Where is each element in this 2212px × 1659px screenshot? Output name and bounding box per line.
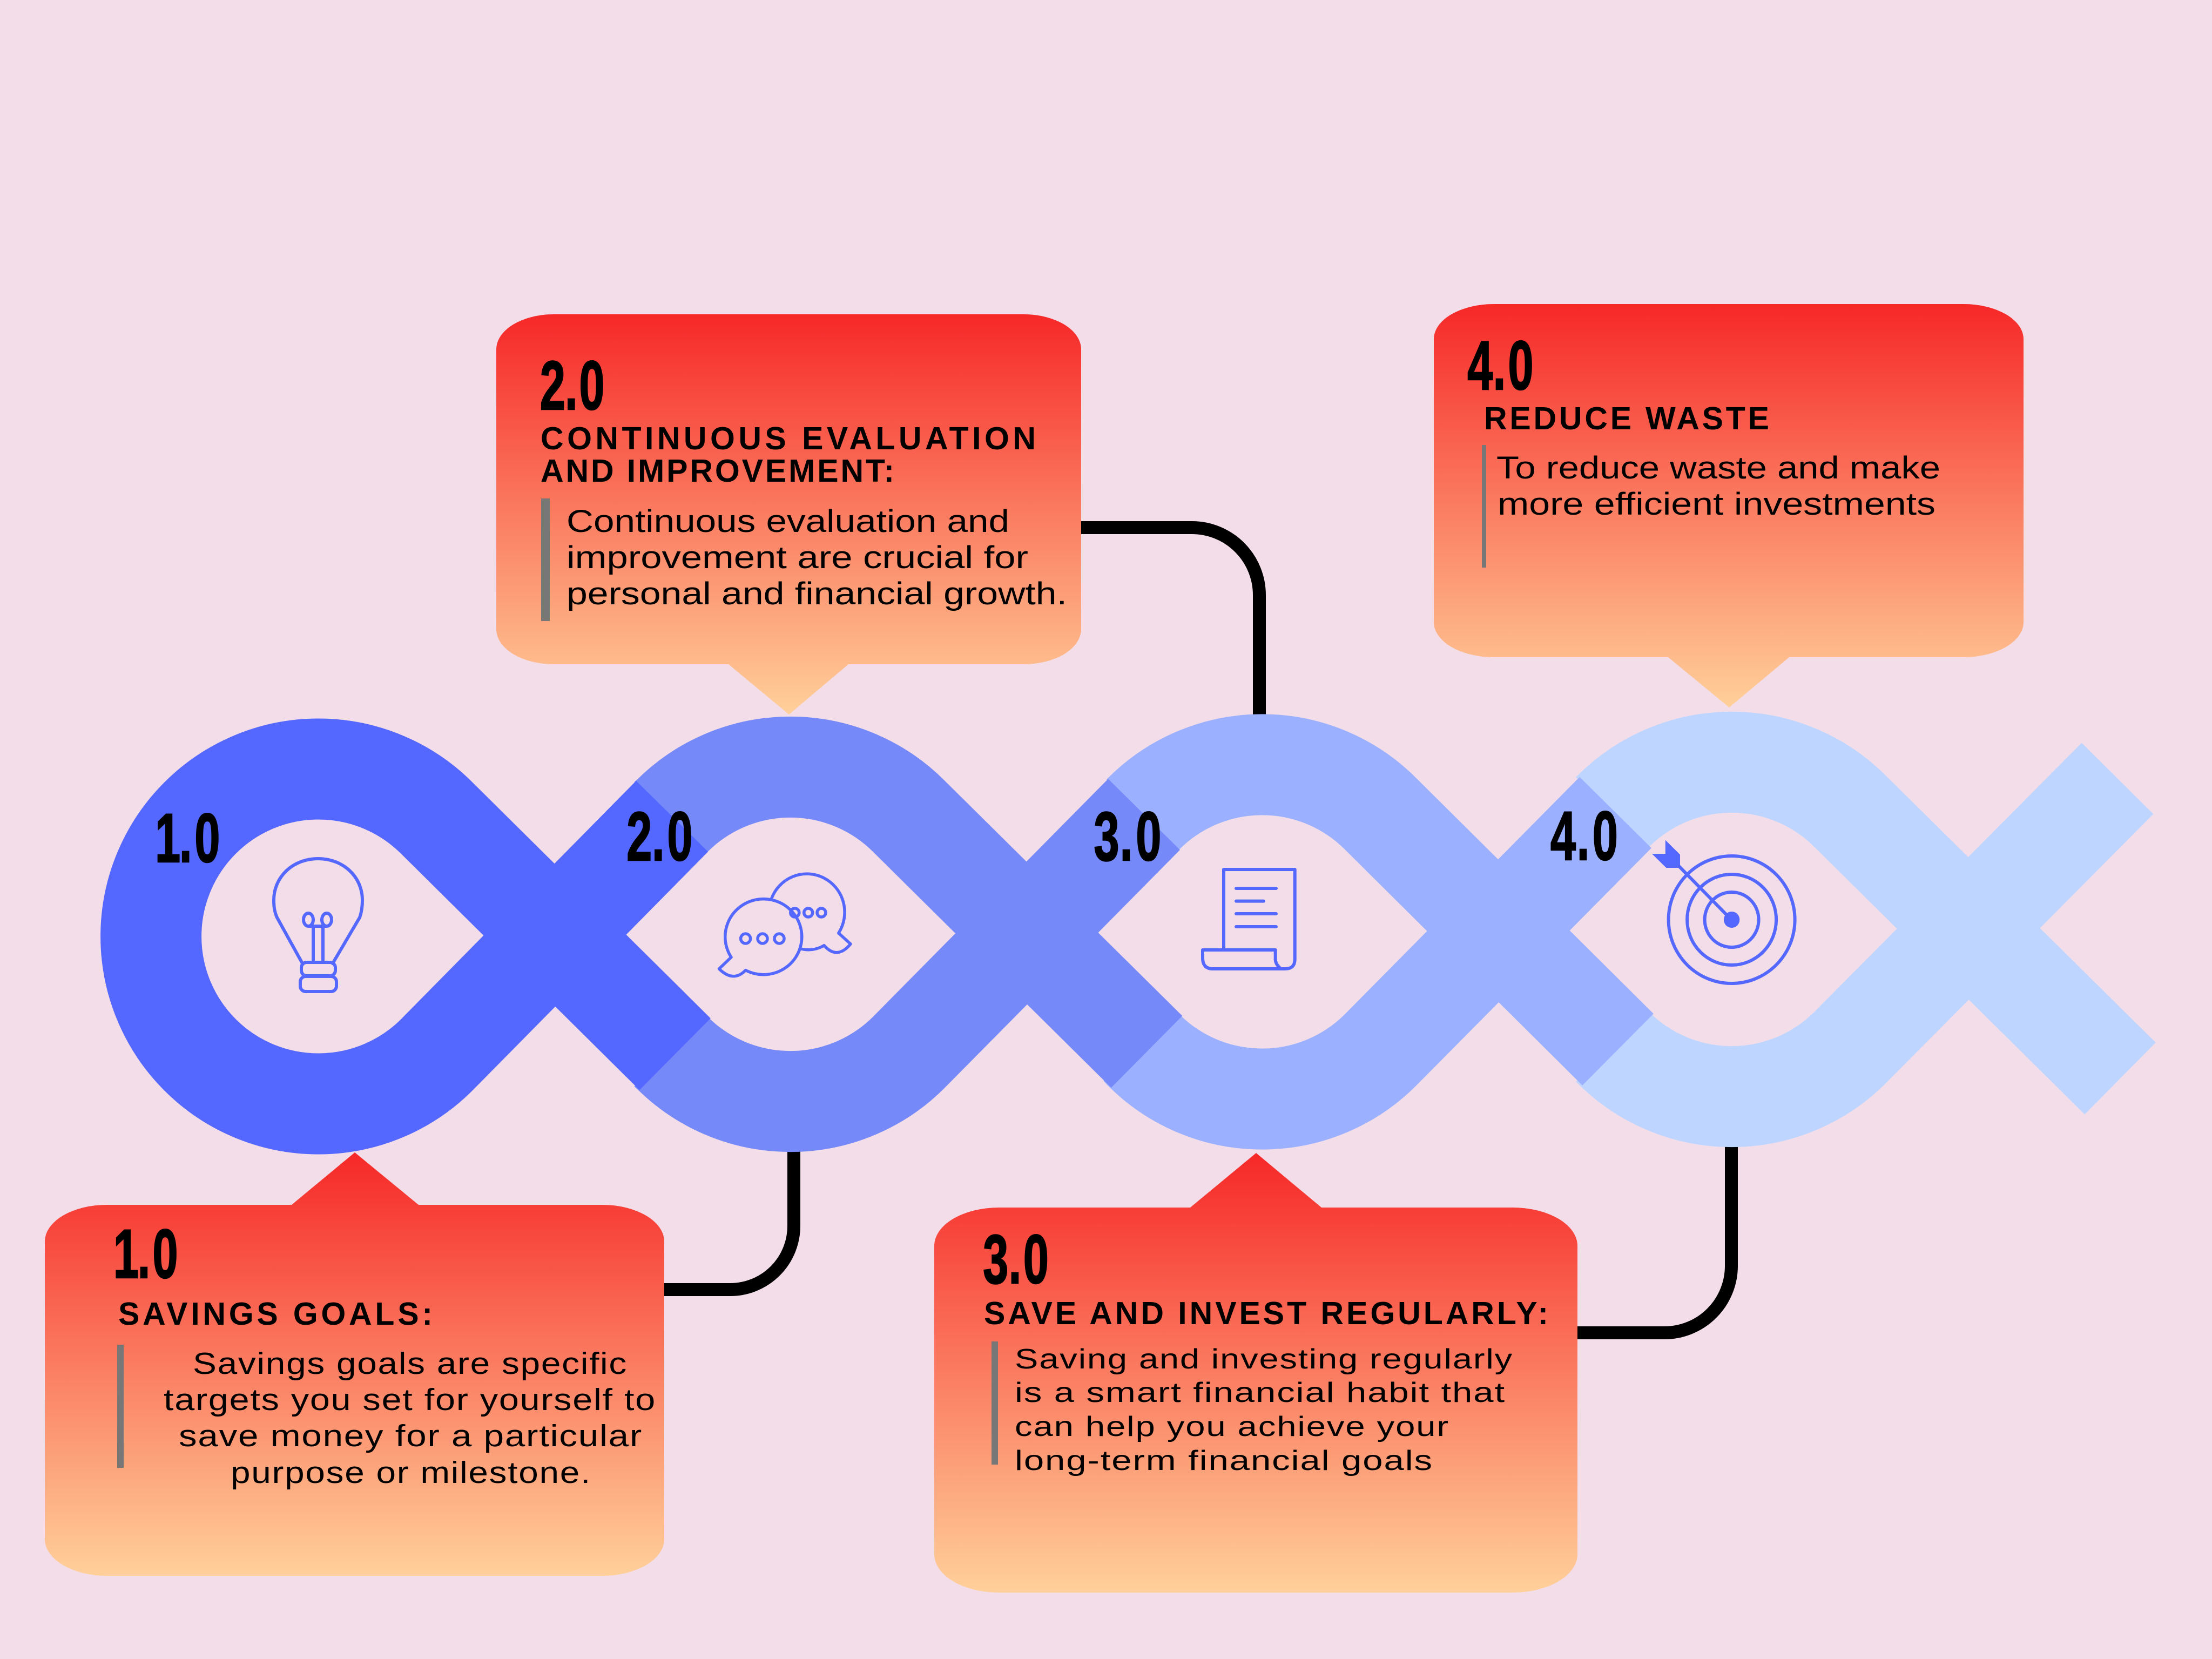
panel: 4.0 reduce waste: [1434, 304, 2024, 707]
panel heading: [541, 421, 1036, 489]
panel body text: To reduce waste and make: [1496, 450, 1940, 485]
panel number: 2.0: [540, 347, 604, 424]
panel body text: improvement are crucial for: [567, 540, 1028, 575]
panel body text: personal and financial growth.: [567, 576, 1067, 611]
accent bar: [541, 498, 550, 621]
panel body text: can help you achieve your: [1015, 1411, 1449, 1442]
panel: 1.0 savings goals: [45, 1152, 664, 1576]
icon: chat bubbles: [719, 874, 851, 976]
panel body text: is a smart financial habit that: [1015, 1377, 1506, 1408]
ribbon segment 1: [151, 769, 675, 1104]
icon: target with arrow: [1652, 840, 1795, 983]
ribbon segment 3: [1141, 765, 1618, 1099]
panel heading: AND IMPROVEMENT:: [541, 453, 894, 489]
panel heading: CONTINUOUS EVALUATION: [541, 421, 1036, 456]
panel body text: [1015, 1344, 1513, 1476]
panel body text: Saving and investing regularly: [1015, 1344, 1513, 1375]
panel heading: REDUCE WASTE: [1484, 401, 1769, 436]
panel body text: save money for a particular: [179, 1419, 643, 1453]
panel body text: [567, 504, 1067, 611]
panel number: 1.0: [113, 1215, 178, 1292]
woven ribbon chain: [151, 762, 2120, 1104]
panel body text: purpose or milestone.: [231, 1455, 591, 1490]
connector: step 1 panel to ring 2: [664, 1149, 794, 1290]
connector: step 3 panel to ring 4: [1577, 1145, 1731, 1333]
ring number 3.0: 3.0: [1094, 798, 1161, 875]
panel number: 4.0: [1467, 327, 1533, 404]
panel: 3.0 save and invest regularly: [934, 1153, 1577, 1593]
accent bar: [992, 1341, 998, 1465]
ring number 1.0: 1.0: [155, 799, 220, 876]
panel body text: [1496, 450, 1940, 522]
ring number 2.0: 2.0: [626, 798, 693, 875]
accent bar: [1482, 445, 1486, 568]
panel number: 3.0: [983, 1220, 1049, 1298]
panel heading: SAVE AND INVEST REGULARLY:: [984, 1296, 1548, 1331]
panel body text: [164, 1346, 656, 1490]
panel body text: long-term financial goals: [1015, 1445, 1433, 1476]
ring number 4.0: 4.0: [1550, 797, 1618, 874]
accent bar: [117, 1345, 124, 1468]
panel body text: Savings goals are specific: [193, 1346, 628, 1381]
icon: light bulb: [274, 859, 362, 992]
icon: document scroll: [1203, 869, 1295, 969]
ribbon segment 4: [1610, 762, 2120, 1097]
panel heading: SAVINGS GOALS:: [118, 1296, 433, 1332]
panel body text: targets you set for yourself to: [164, 1382, 656, 1417]
panel body text: Continuous evaluation and: [567, 504, 1009, 539]
panel: 2.0 continuous evaluation and improvement: [496, 314, 1081, 714]
connector: step 2 panel to ring 3: [1081, 528, 1259, 716]
ribbon segment 2: [669, 767, 1147, 1102]
panel body text: more efficient investments: [1498, 487, 1936, 522]
